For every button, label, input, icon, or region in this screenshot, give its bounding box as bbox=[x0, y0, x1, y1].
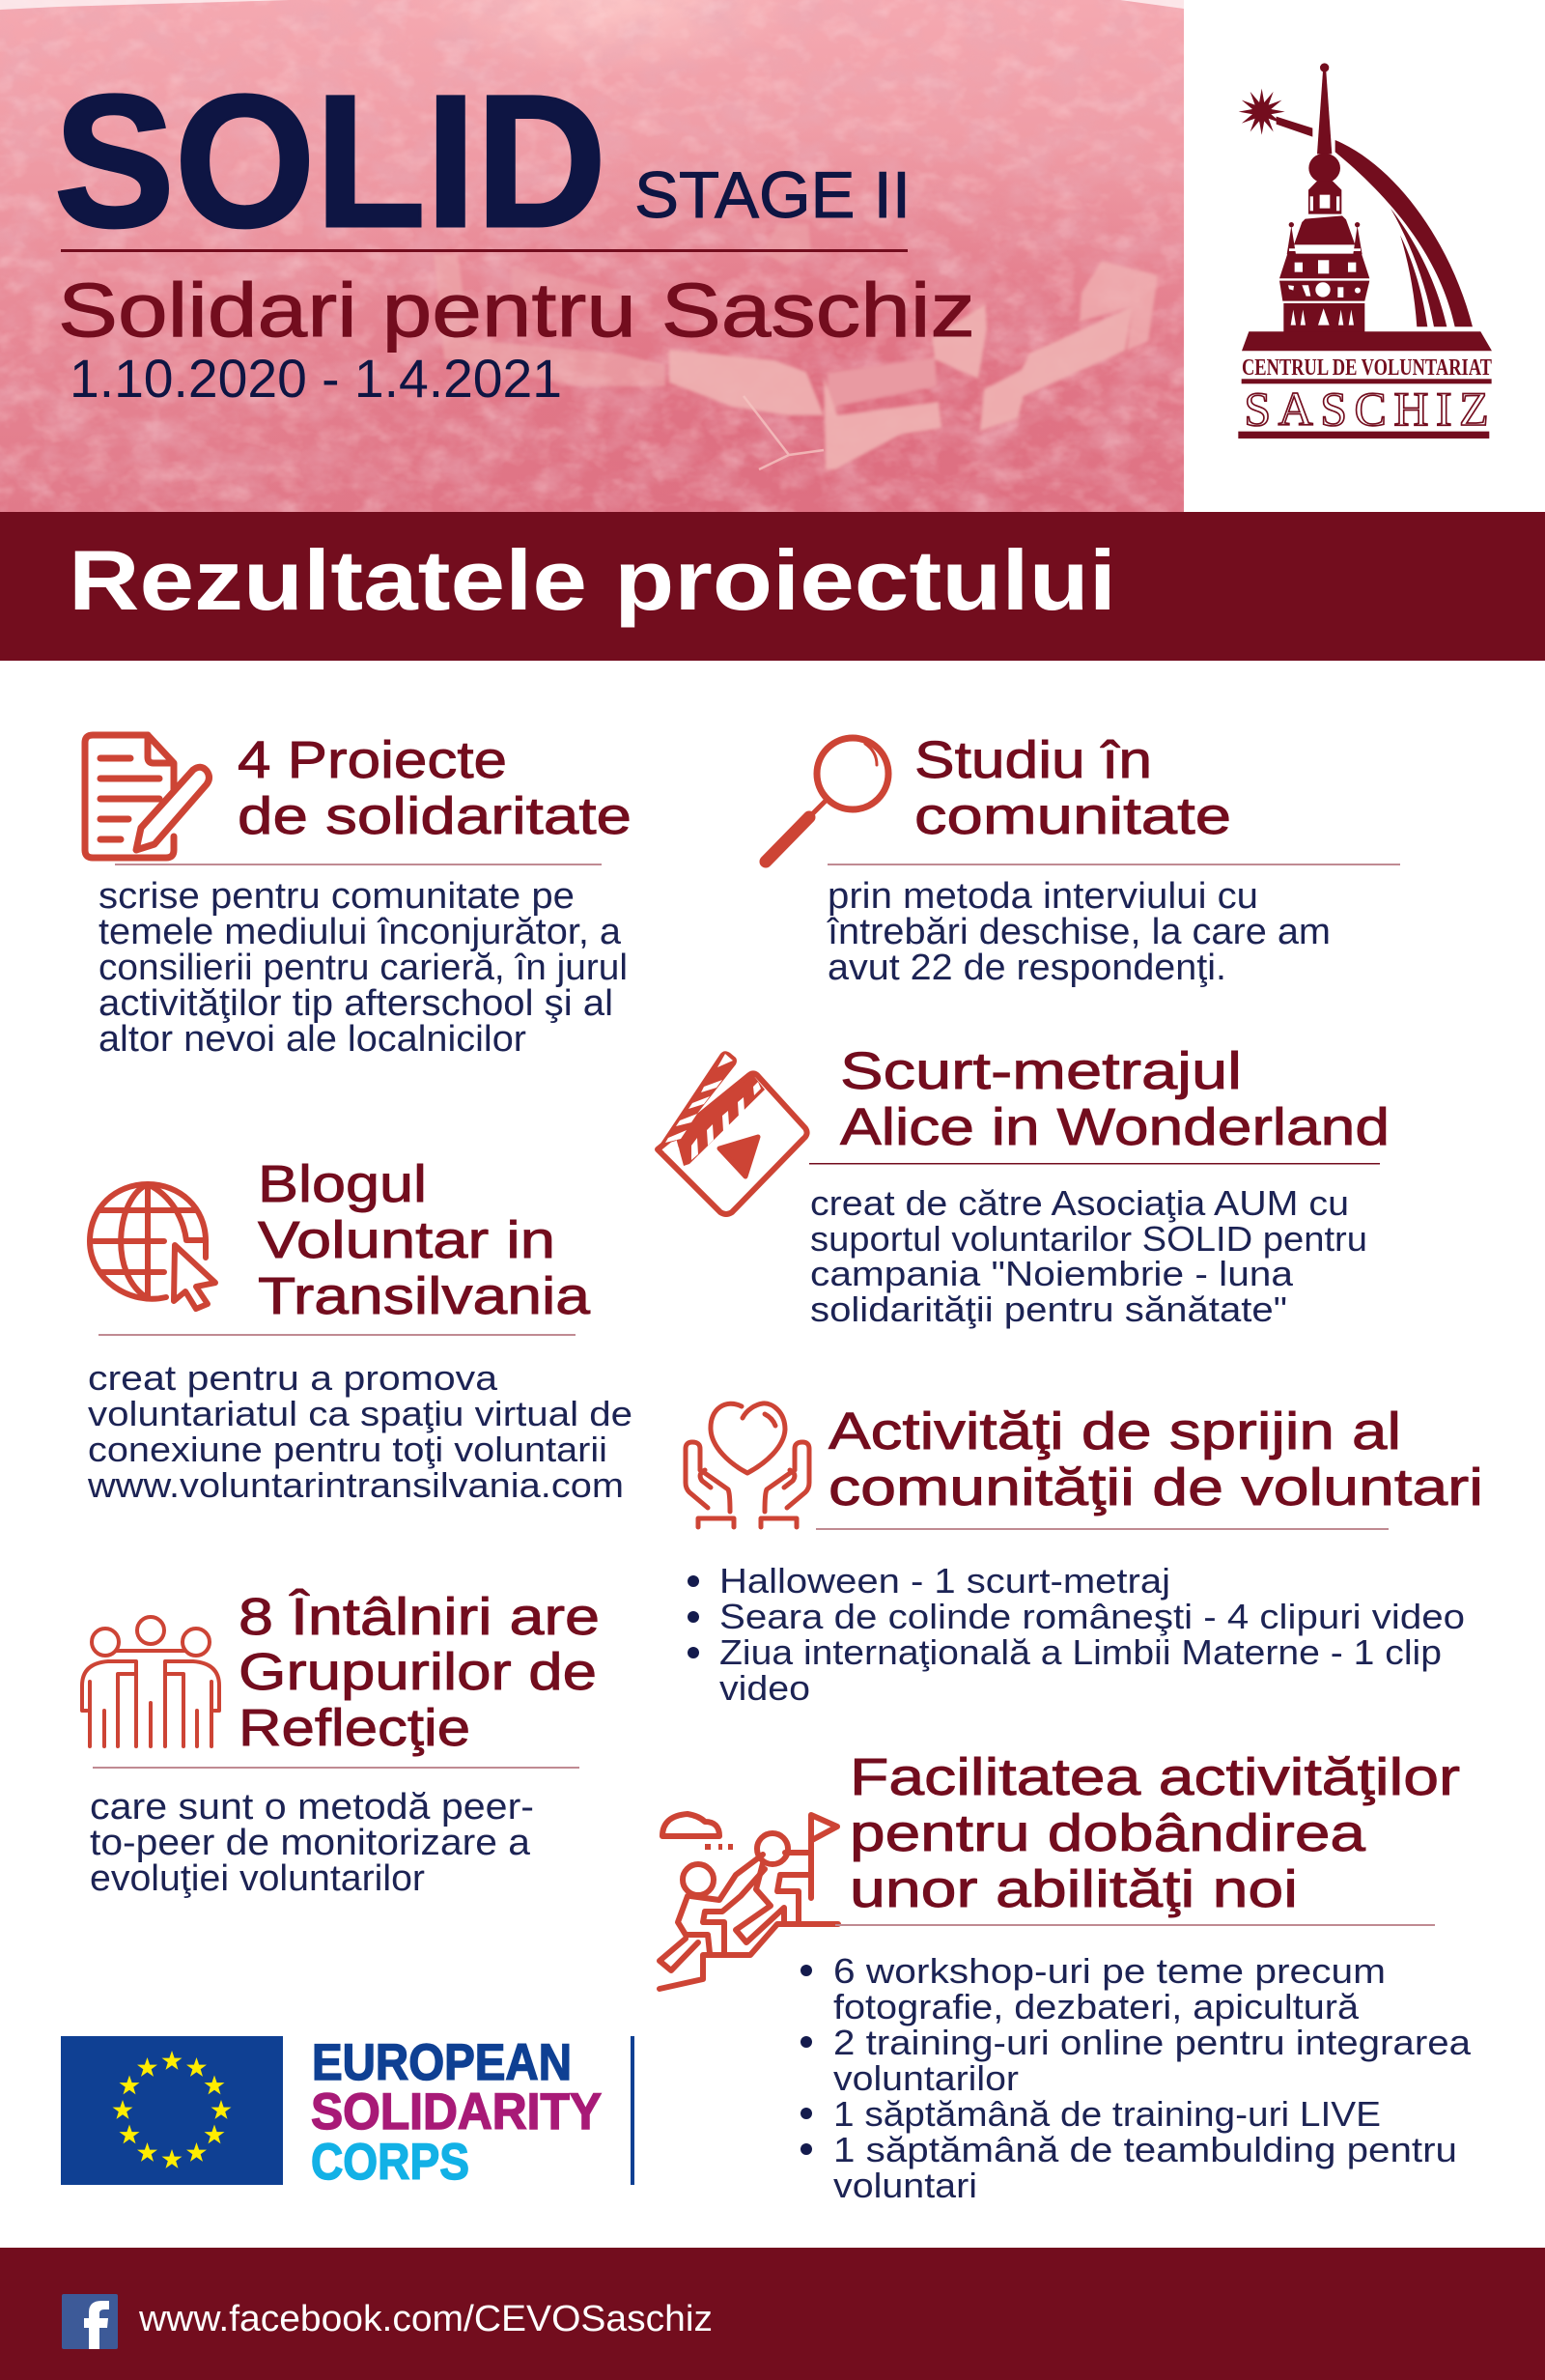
heading: Blogul bbox=[258, 1155, 427, 1213]
body text: creat de către Asociaţia AUM cu bbox=[810, 1183, 1349, 1223]
panel: Activitati de sprijin bbox=[686, 1402, 1483, 1708]
heading: Transilvania bbox=[258, 1267, 591, 1325]
body text: voluntariatul ca spaţiu virtual de bbox=[88, 1394, 632, 1433]
wordmark: SOLIDARITY bbox=[311, 2083, 602, 2140]
bullet list: 1 săptămână de teambulding pentru bbox=[833, 2130, 1457, 2169]
panel: Blogul Voluntar in Transilvania bbox=[87, 1155, 632, 1505]
bullet list bbox=[801, 1951, 1472, 2205]
divider bbox=[98, 1334, 576, 1336]
heading: Studiu în bbox=[914, 731, 1152, 789]
heading: Alice in Wonderland bbox=[840, 1098, 1390, 1156]
icon: facebook bbox=[62, 2294, 118, 2349]
body text: temele mediului înconjurător, a bbox=[98, 912, 622, 952]
body text bbox=[87, 1358, 632, 1505]
body text: www.voluntarintransilvania.com bbox=[87, 1465, 624, 1505]
bullet list: Halloween - 1 scurt-metraj bbox=[719, 1561, 1170, 1601]
heading: 8 Întâlniri are bbox=[239, 1588, 600, 1646]
body text bbox=[827, 876, 1331, 988]
body text bbox=[90, 1787, 534, 1899]
heading: Scurt-metrajul bbox=[840, 1042, 1242, 1100]
heading bbox=[829, 1402, 1483, 1516]
heading bbox=[238, 731, 632, 845]
icon: climbers reaching flag bbox=[660, 1814, 838, 1989]
vertical bar bbox=[631, 2036, 634, 2185]
heading bbox=[850, 1748, 1460, 1918]
icon: EU flag bbox=[61, 2036, 283, 2185]
heading: Voluntar in bbox=[258, 1211, 555, 1269]
icon: clapperboard with play button bbox=[657, 1051, 807, 1214]
footer link: www.facebook.com/CEVOSaschiz bbox=[138, 2299, 713, 2339]
heading: Reflecţie bbox=[239, 1699, 470, 1757]
panel: 8 Intalniri ale Grupurilor de Reflectie bbox=[82, 1588, 600, 1899]
divider bbox=[835, 1924, 1435, 1926]
results band bbox=[0, 512, 1545, 661]
icon: group of three people bbox=[82, 1617, 219, 1746]
heading bbox=[239, 1588, 600, 1757]
body text: scrise pentru comunitate pe bbox=[98, 876, 575, 917]
bullet list bbox=[688, 1561, 1465, 1708]
panel: Facilitatea activitatilor bbox=[660, 1748, 1472, 2205]
body text: solidarităţii pentru sănătate" bbox=[810, 1289, 1287, 1329]
body text: suportul voluntarilor SOLID pentru bbox=[810, 1219, 1367, 1259]
header photo: Saschiz fortress in red tint bbox=[0, 0, 1184, 512]
icon: document with pencil bbox=[85, 735, 209, 858]
logo: Centrul de Voluntariat Saschiz bbox=[1238, 63, 1492, 439]
wordmark: EUROPEAN bbox=[312, 2034, 572, 2091]
heading: de solidaritate bbox=[238, 787, 632, 845]
body text bbox=[98, 876, 628, 1060]
bullet list: 6 workshop-uri pe teme precum bbox=[833, 1951, 1386, 1991]
heading: unor abilităţi noi bbox=[850, 1860, 1298, 1918]
body text bbox=[810, 1183, 1367, 1329]
title divider bbox=[61, 249, 908, 252]
bullet list: fotografie, dezbateri, apicultură bbox=[833, 1987, 1360, 2026]
bullet list: 1 săptămână de training-uri LIVE bbox=[833, 2094, 1381, 2134]
heading: 4 Proiecte bbox=[238, 731, 507, 789]
body text: to-peer de monitorizare a bbox=[90, 1823, 531, 1863]
bullet list: voluntarilor bbox=[833, 2058, 1019, 2098]
divider bbox=[115, 864, 602, 865]
results heading: Rezultatele proiectului bbox=[69, 532, 1116, 628]
divider bbox=[809, 1163, 1380, 1165]
body text: prin metoda interviului cu bbox=[828, 876, 1258, 917]
footer band bbox=[0, 2248, 1545, 2380]
body text: altor nevoi ale localnicilor bbox=[98, 1019, 526, 1060]
heading bbox=[914, 731, 1231, 845]
subtitle: STAGE II: STAGE II bbox=[634, 158, 911, 232]
divider bbox=[816, 1528, 1389, 1530]
logo: Centrul de Voluntariat Saschiz: SASCHIZ bbox=[1244, 382, 1489, 436]
panel: 4 Proiecte de solidaritate bbox=[85, 731, 632, 1060]
panel: Scurt-metrajul Alice in Wonderland bbox=[657, 1042, 1390, 1329]
heading bbox=[840, 1042, 1390, 1156]
body text: consilierii pentru carieră, în jurul bbox=[98, 948, 628, 988]
bullet list: Ziua internaţională a Limbii Materne - 1 clip bbox=[719, 1632, 1442, 1672]
logo: European Solidarity Corps bbox=[61, 2034, 634, 2191]
divider bbox=[93, 1767, 579, 1769]
heading bbox=[258, 1155, 591, 1325]
heading: comunităţii de voluntari bbox=[829, 1459, 1483, 1516]
wordmark: CORPS bbox=[311, 2134, 469, 2191]
wordmark bbox=[311, 2034, 602, 2191]
body text: activităţilor tip afterschool şi al bbox=[98, 983, 613, 1024]
body text: care sunt o metodă peer- bbox=[90, 1787, 534, 1828]
icon: globe with cursor bbox=[90, 1184, 215, 1309]
bullet list: voluntari bbox=[833, 2166, 977, 2205]
body text: creat pentru a promova bbox=[88, 1358, 498, 1398]
body text: întrebări deschise, la care am bbox=[827, 912, 1331, 952]
body text: conexiune pentru toţi voluntarii bbox=[88, 1430, 607, 1469]
title: SOLID: SOLID bbox=[54, 56, 606, 267]
heading: pentru dobândirea bbox=[850, 1804, 1366, 1862]
heading: Facilitatea activităţilor bbox=[850, 1748, 1460, 1806]
bullet list: 2 training-uri online pentru integrarea bbox=[833, 2023, 1472, 2062]
divider bbox=[828, 864, 1400, 865]
heading: comunitate bbox=[914, 787, 1231, 845]
bullet list: video bbox=[719, 1668, 810, 1708]
icon: magnifying glass bbox=[766, 738, 888, 862]
bullet list: Seara de colinde româneşti - 4 clipuri video bbox=[719, 1597, 1465, 1636]
body text: evoluţiei voluntarilor bbox=[90, 1858, 425, 1899]
icon: hands holding heart bbox=[686, 1403, 809, 1527]
heading: Activităţi de sprijin al bbox=[829, 1402, 1401, 1460]
body text: avut 22 de respondenţi. bbox=[828, 948, 1226, 988]
body text: campania "Noiembrie - luna bbox=[810, 1254, 1294, 1293]
project dates: 1.10.2020 - 1.4.2021 bbox=[70, 348, 562, 409]
panel: Studiu in comunitate bbox=[766, 731, 1400, 988]
project name: Solidari pentru Saschiz bbox=[58, 267, 975, 353]
heading: Grupurilor de bbox=[239, 1643, 597, 1701]
